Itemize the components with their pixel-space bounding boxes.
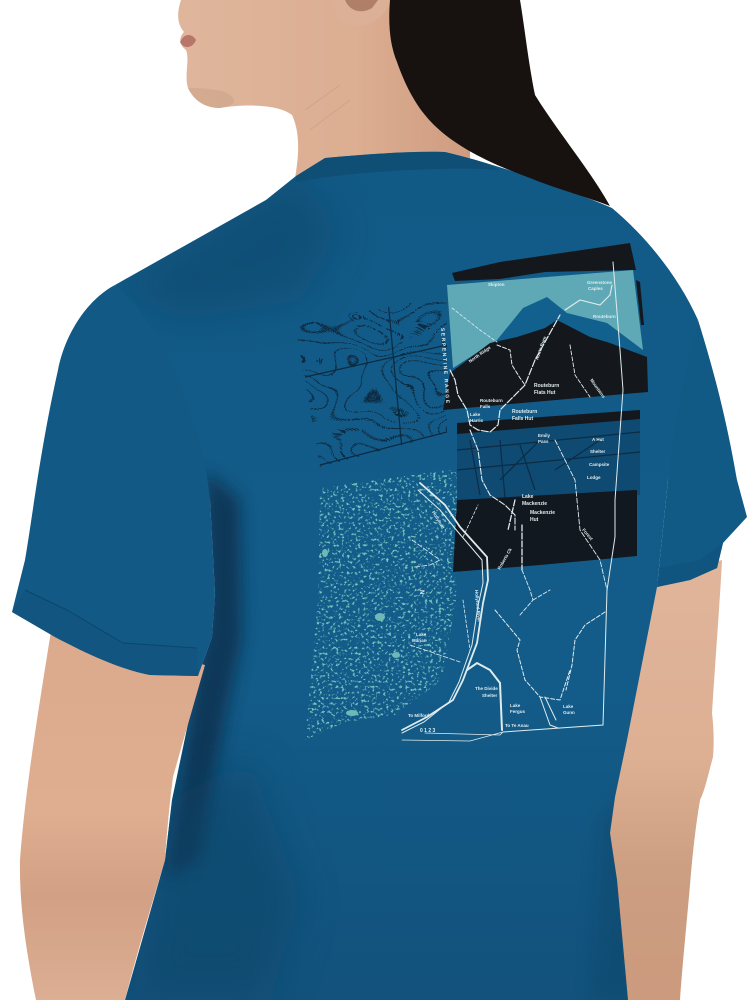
print: map labels: Lake — [563, 704, 574, 709]
print: map labels: 0 1 2 3 — [420, 728, 436, 734]
print: light teal sky panel — [447, 270, 643, 368]
print: map labels: Hut — [530, 517, 539, 523]
print: map labels: Hollyford River — [474, 590, 482, 622]
print: map labels: Flats Hut — [534, 390, 556, 396]
print: map labels: Caples — [588, 286, 603, 291]
print: map labels: Routeburn — [534, 383, 559, 389]
print: map labels: Mackenzie — [522, 501, 547, 507]
print: speckled satellite map — [305, 470, 457, 740]
print: map labels: Marian — [412, 638, 427, 643]
collar — [296, 152, 500, 182]
print: map labels: To Te Anau — [505, 723, 529, 728]
hair — [389, 0, 610, 206]
print: map labels: Lake — [522, 494, 534, 500]
right arm — [600, 560, 722, 1000]
jaw stubble — [188, 88, 234, 108]
print: map labels: Routeburn — [593, 314, 616, 319]
print: map labels: Pass — [538, 439, 549, 444]
print: map labels: Mountains — [589, 378, 606, 399]
print: map labels: Skipton — [488, 282, 505, 287]
arch — [467, 663, 502, 730]
print: map labels: Lake — [470, 412, 481, 417]
print: mountain — [443, 297, 648, 410]
print: map labels: North Ridge — [468, 345, 492, 364]
print: map labels: Falls — [480, 404, 491, 409]
frame — [503, 262, 623, 732]
ear — [332, 0, 392, 26]
print: map labels: Lodge — [587, 475, 601, 480]
print: map labels: Routeburn — [480, 398, 503, 403]
upper-back shadow — [124, 176, 330, 316]
print: black brush stroke — [452, 243, 644, 325]
print: dark block — [453, 490, 637, 572]
print: map labels: Routeburn — [512, 409, 537, 415]
print: map labels: Falls Hut — [512, 416, 533, 422]
right-edge shadow — [598, 802, 628, 998]
print: map labels: Forest — [581, 527, 594, 542]
print: map labels: Lake — [510, 703, 521, 708]
print: map labels: Fergus — [510, 709, 526, 714]
print: map labels: Campsite — [589, 462, 610, 467]
lips — [180, 35, 196, 47]
print: map labels: A Hut — [592, 437, 604, 442]
print: map labels — [408, 280, 616, 734]
print: map labels: Lake — [416, 632, 427, 637]
print: map labels: N — [418, 590, 424, 594]
print: topographic map — [298, 302, 447, 467]
print: map labels: Route Burn — [534, 335, 547, 360]
main river — [402, 483, 488, 730]
right sleeve — [657, 320, 747, 587]
lower routes — [520, 570, 550, 615]
print: map labels: Greenstone — [587, 280, 613, 285]
lower-left shadow — [127, 770, 291, 993]
print: map labels: SERPENTINE RANGE — [439, 328, 450, 405]
print: white route lines — [402, 262, 623, 741]
print: map labels: Emily — [538, 433, 551, 438]
sleeve hem stitch — [25, 590, 197, 648]
print: map labels: Shelter — [482, 693, 498, 698]
print: map labels: To Milford — [408, 713, 430, 718]
print: map labels: Hollyford — [431, 510, 445, 530]
t-shirt body — [100, 140, 720, 1000]
face and neck — [178, 0, 470, 178]
print: map labels: Harris — [470, 418, 484, 423]
neck crease — [305, 85, 350, 130]
underarm shadow — [165, 470, 242, 880]
hem band — [12, 590, 198, 676]
print: map labels: Roberts Ck — [497, 547, 513, 570]
left sleeve — [12, 285, 215, 676]
upper routes — [450, 315, 560, 432]
print: map labels: The Divide — [475, 686, 498, 691]
left arm — [20, 625, 205, 1000]
print: map labels: Gunn — [563, 710, 575, 715]
print: map labels: Mackenzie — [530, 510, 555, 516]
print: map labels: Shelter — [590, 449, 606, 454]
print: dark map band — [457, 410, 640, 505]
